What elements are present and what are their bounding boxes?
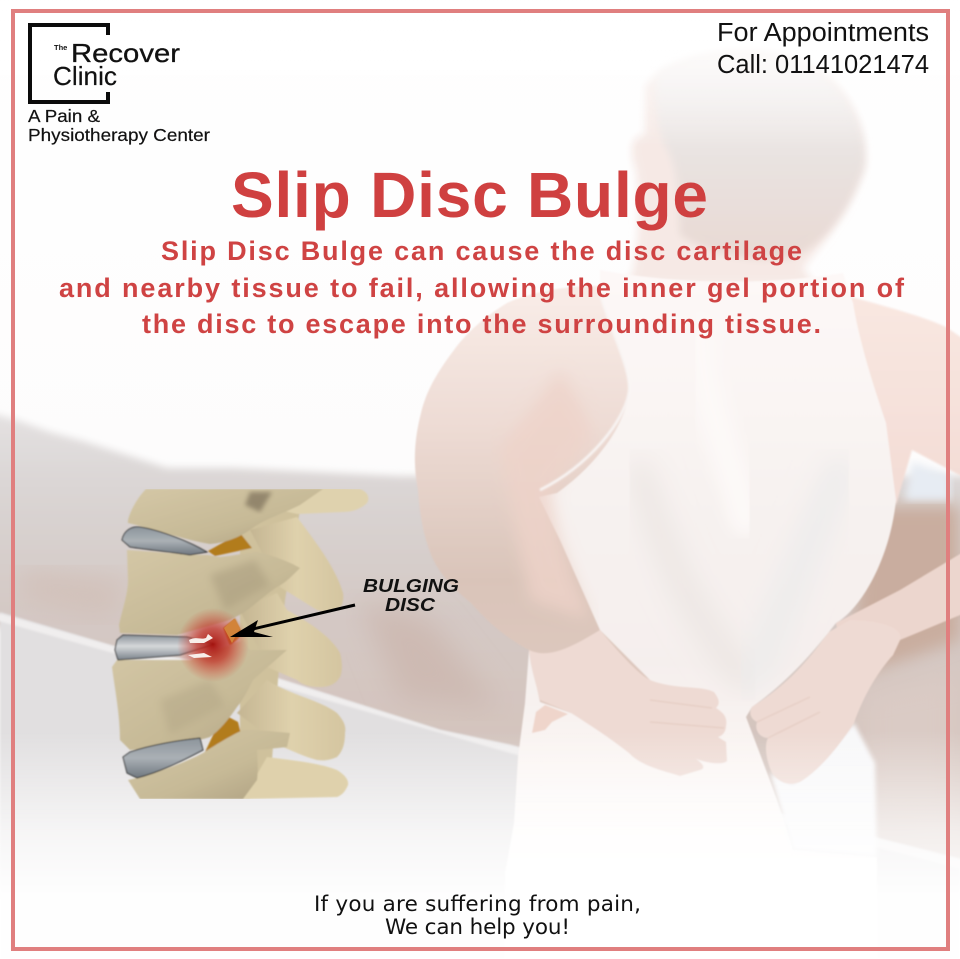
lower back shirt right panel [770,723,877,857]
left strap edge [540,293,629,490]
logo tagline: A Pain & [28,106,100,126]
man with back pain [415,51,960,959]
appointment contact [717,19,929,79]
appointment contact: Call: 01141021474 [717,51,929,79]
logo name: The [54,43,67,52]
left arm inner shading [500,370,590,620]
description [59,236,905,339]
left arm and shoulder [415,286,650,713]
spine illustration [112,488,459,799]
logo name [53,38,180,91]
description: Slip Disc Bulge can cause the disc cartilage [161,236,802,266]
right shoulder [845,295,960,505]
closing message: If you are suffering from pain, [314,892,641,917]
bulging disc label: BULGING [363,575,459,596]
logo square bracket [30,25,108,102]
torn shirt gap [532,705,568,733]
logo name: Recover [71,38,180,68]
arrow to disc [253,605,355,629]
bulging disc label [363,575,459,615]
description: and nearby tissue to fail, allowing the inner gel portion of [59,273,905,303]
description: the disc to escape into the surrounding tissue. [142,309,821,339]
bulging disc label: DISC [385,594,436,615]
logo tagline [28,106,210,145]
vertebrae [128,489,323,544]
logo [28,25,210,145]
appointment contact: For Appointments [717,19,929,47]
bone backing [238,511,300,774]
bone shading [245,492,272,512]
head and neck [620,51,865,285]
tank top [505,270,896,959]
closing message [314,892,641,940]
logo tagline: Physiotherapy Center [28,125,210,145]
right hand [750,620,900,784]
transverse processes [280,488,368,514]
closing message: We can help you! [385,915,570,940]
left hand [529,630,727,776]
shirt folds [640,330,840,680]
spinal cord segments [208,533,252,556]
title: Slip Disc Bulge [231,159,708,231]
right forearm [836,551,960,723]
discs [122,527,207,555]
logo name: Clinic [53,61,117,91]
inflamed bulge [177,608,249,682]
